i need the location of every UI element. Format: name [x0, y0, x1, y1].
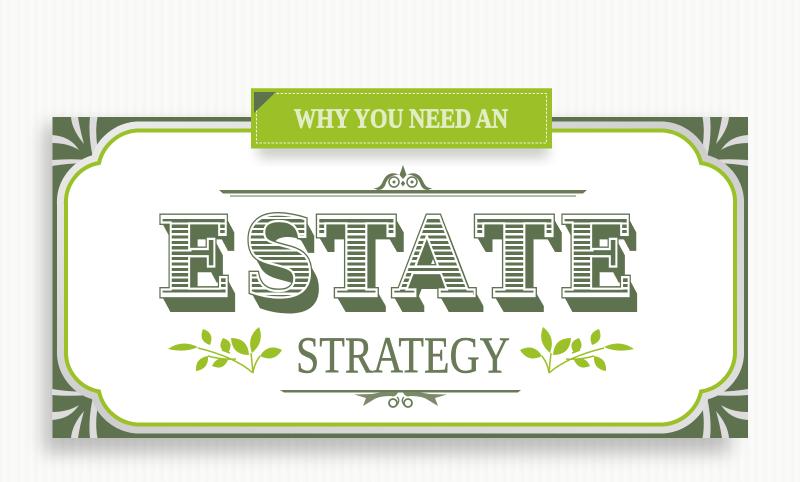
ESTATE title: S [243, 193, 316, 322]
ESTATE title: E [559, 193, 634, 322]
top divider rule [219, 190, 587, 196]
right leaf sprig [520, 327, 634, 373]
panel: card frame [52, 117, 748, 438]
dashed stitching [256, 94, 546, 143]
STRATEGY label: STRATEGY [296, 328, 510, 384]
silver band [66, 130, 735, 424]
white panel with green border [66, 130, 735, 424]
ESTATE title: T [475, 193, 554, 322]
corner rays [52, 117, 748, 438]
folded corner [254, 92, 276, 113]
ribbon heading: WHY YOU NEED AN [294, 102, 508, 134]
ESTATE title: E [157, 193, 232, 322]
ESTATE title: A [394, 193, 473, 322]
card shadow [44, 125, 730, 453]
bottom ornament [354, 392, 447, 407]
bottom divider rule [280, 390, 521, 392]
ESTATE title: T [317, 193, 396, 322]
ESTATE title [157, 193, 638, 322]
left leaf sprig [168, 327, 282, 373]
ribbon banner [251, 88, 552, 148]
top ornament [373, 165, 433, 190]
ribbon shadow [258, 140, 548, 158]
